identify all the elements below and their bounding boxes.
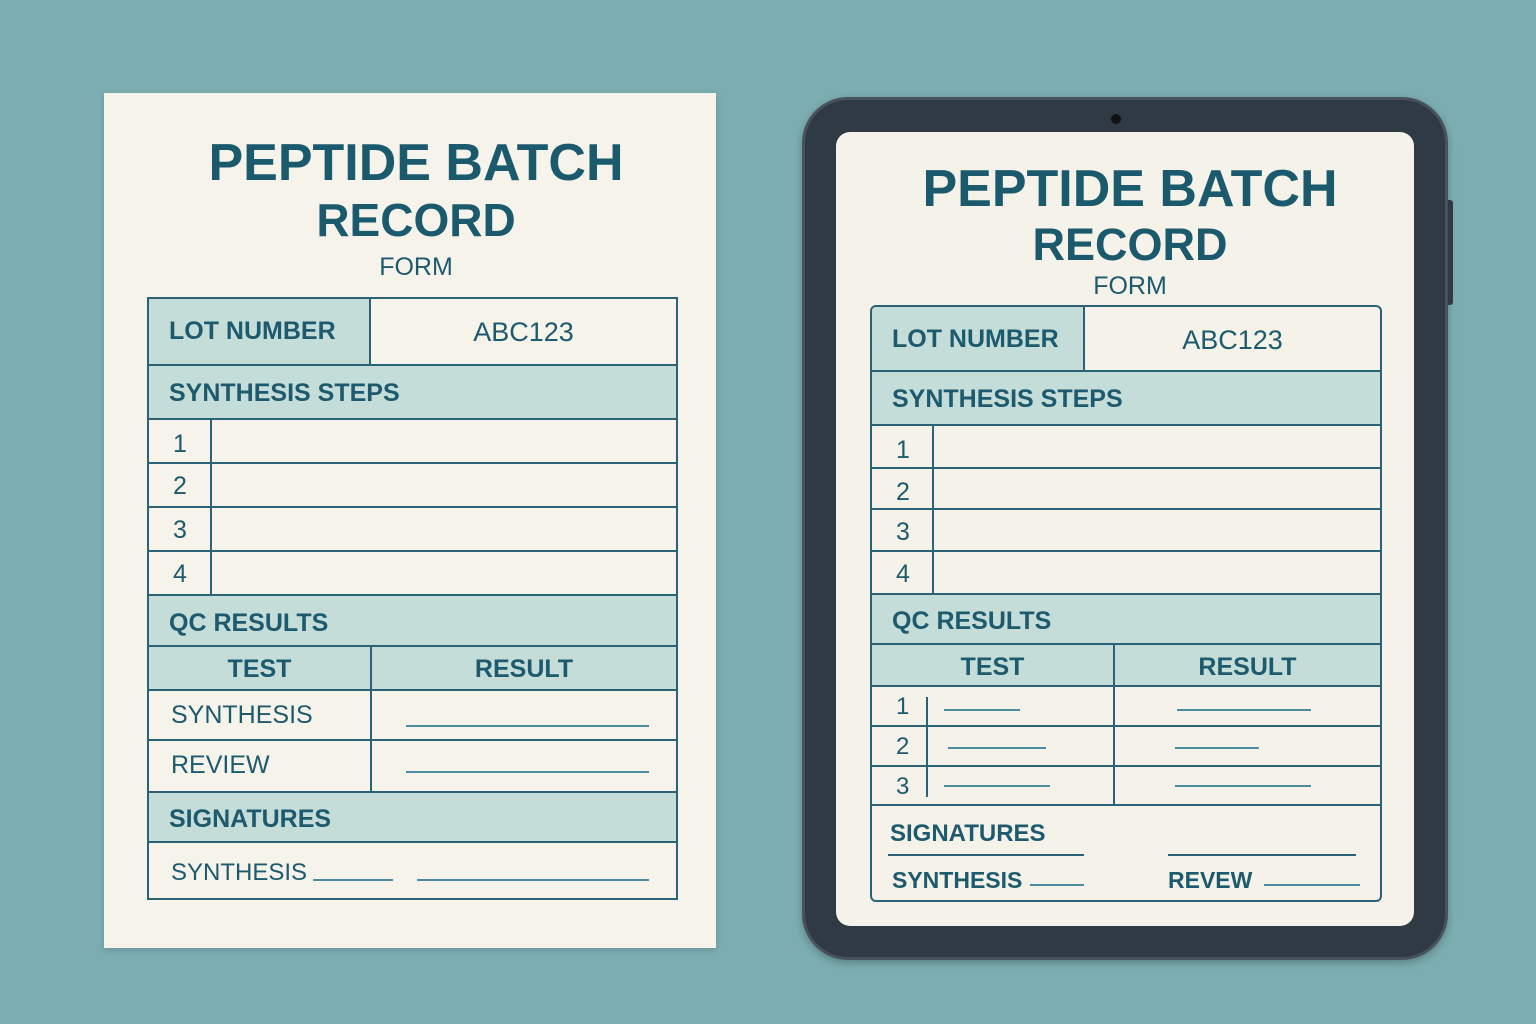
synthesis steps header [872, 370, 1380, 426]
step rows: 3 [896, 518, 910, 546]
step rows: 2 [173, 472, 187, 500]
table: paper form [147, 297, 678, 900]
signature line: SYNTHESIS [171, 859, 307, 886]
QC numbered rows: 2 [896, 733, 909, 760]
test/result header: TEST [228, 655, 291, 683]
QC results header: QC RESULTS [892, 607, 1051, 635]
step rows: 4 [896, 560, 910, 588]
QC rows: REVIEW [171, 751, 270, 779]
tablet title [922, 160, 1338, 270]
tablet subtitle: FORM [1093, 272, 1167, 300]
step rows: 1 [896, 436, 910, 464]
step rows: 4 [173, 560, 187, 588]
test/result header [872, 645, 1380, 687]
QC results header: QC RESULTS [169, 609, 328, 637]
lot number row: LOT NUMBER [169, 317, 336, 345]
test/result header [149, 647, 676, 691]
signatures header: SIGNATURES [169, 805, 331, 833]
QC numbered rows: 3 [896, 773, 909, 800]
tablet side button [1448, 200, 1453, 305]
QC numbered rows: 1 [896, 693, 909, 720]
QC numbered rows [872, 687, 1380, 806]
lot number row [872, 307, 1085, 370]
signatures block [888, 820, 1360, 893]
synthesis steps header: SYNTHESIS STEPS [169, 379, 400, 407]
tablet title: PEPTIDE BATCH [922, 160, 1338, 218]
title: PEPTIDE BATCH [208, 134, 624, 192]
table: tablet form [870, 305, 1382, 902]
title [208, 134, 624, 246]
step rows [149, 420, 676, 594]
table: tablet form: ABC123 [1182, 325, 1283, 355]
icon: camera [1111, 114, 1121, 124]
step rows: 3 [173, 516, 187, 544]
tablet screen [836, 132, 1414, 926]
step rows [872, 426, 1380, 593]
subtitle: FORM [379, 253, 453, 281]
step rows: 1 [173, 430, 187, 458]
QC results header [872, 593, 1380, 645]
step rows: 2 [896, 478, 910, 506]
signatures block: SYNTHESIS [892, 867, 1022, 893]
synthesis steps header [149, 364, 676, 420]
signatures block: REVEW [1168, 867, 1252, 893]
lot number row: LOT NUMBER [892, 325, 1059, 353]
panel: paper form [104, 93, 716, 948]
tablet title: RECORD [1032, 219, 1228, 270]
test/result header: RESULT [475, 655, 573, 683]
test/result header: RESULT [1198, 653, 1297, 681]
synthesis steps header: SYNTHESIS STEPS [892, 385, 1123, 413]
QC rows [149, 691, 676, 791]
title: RECORD [316, 194, 516, 246]
signatures block: SIGNATURES [890, 820, 1046, 847]
QC rows: SYNTHESIS [171, 701, 313, 729]
test/result header: TEST [961, 653, 1024, 681]
lot number row [149, 299, 371, 364]
QC results header [149, 594, 676, 647]
panel: tablet [802, 97, 1448, 960]
signatures header [149, 791, 676, 843]
table: paper form: ABC123 [473, 317, 574, 347]
